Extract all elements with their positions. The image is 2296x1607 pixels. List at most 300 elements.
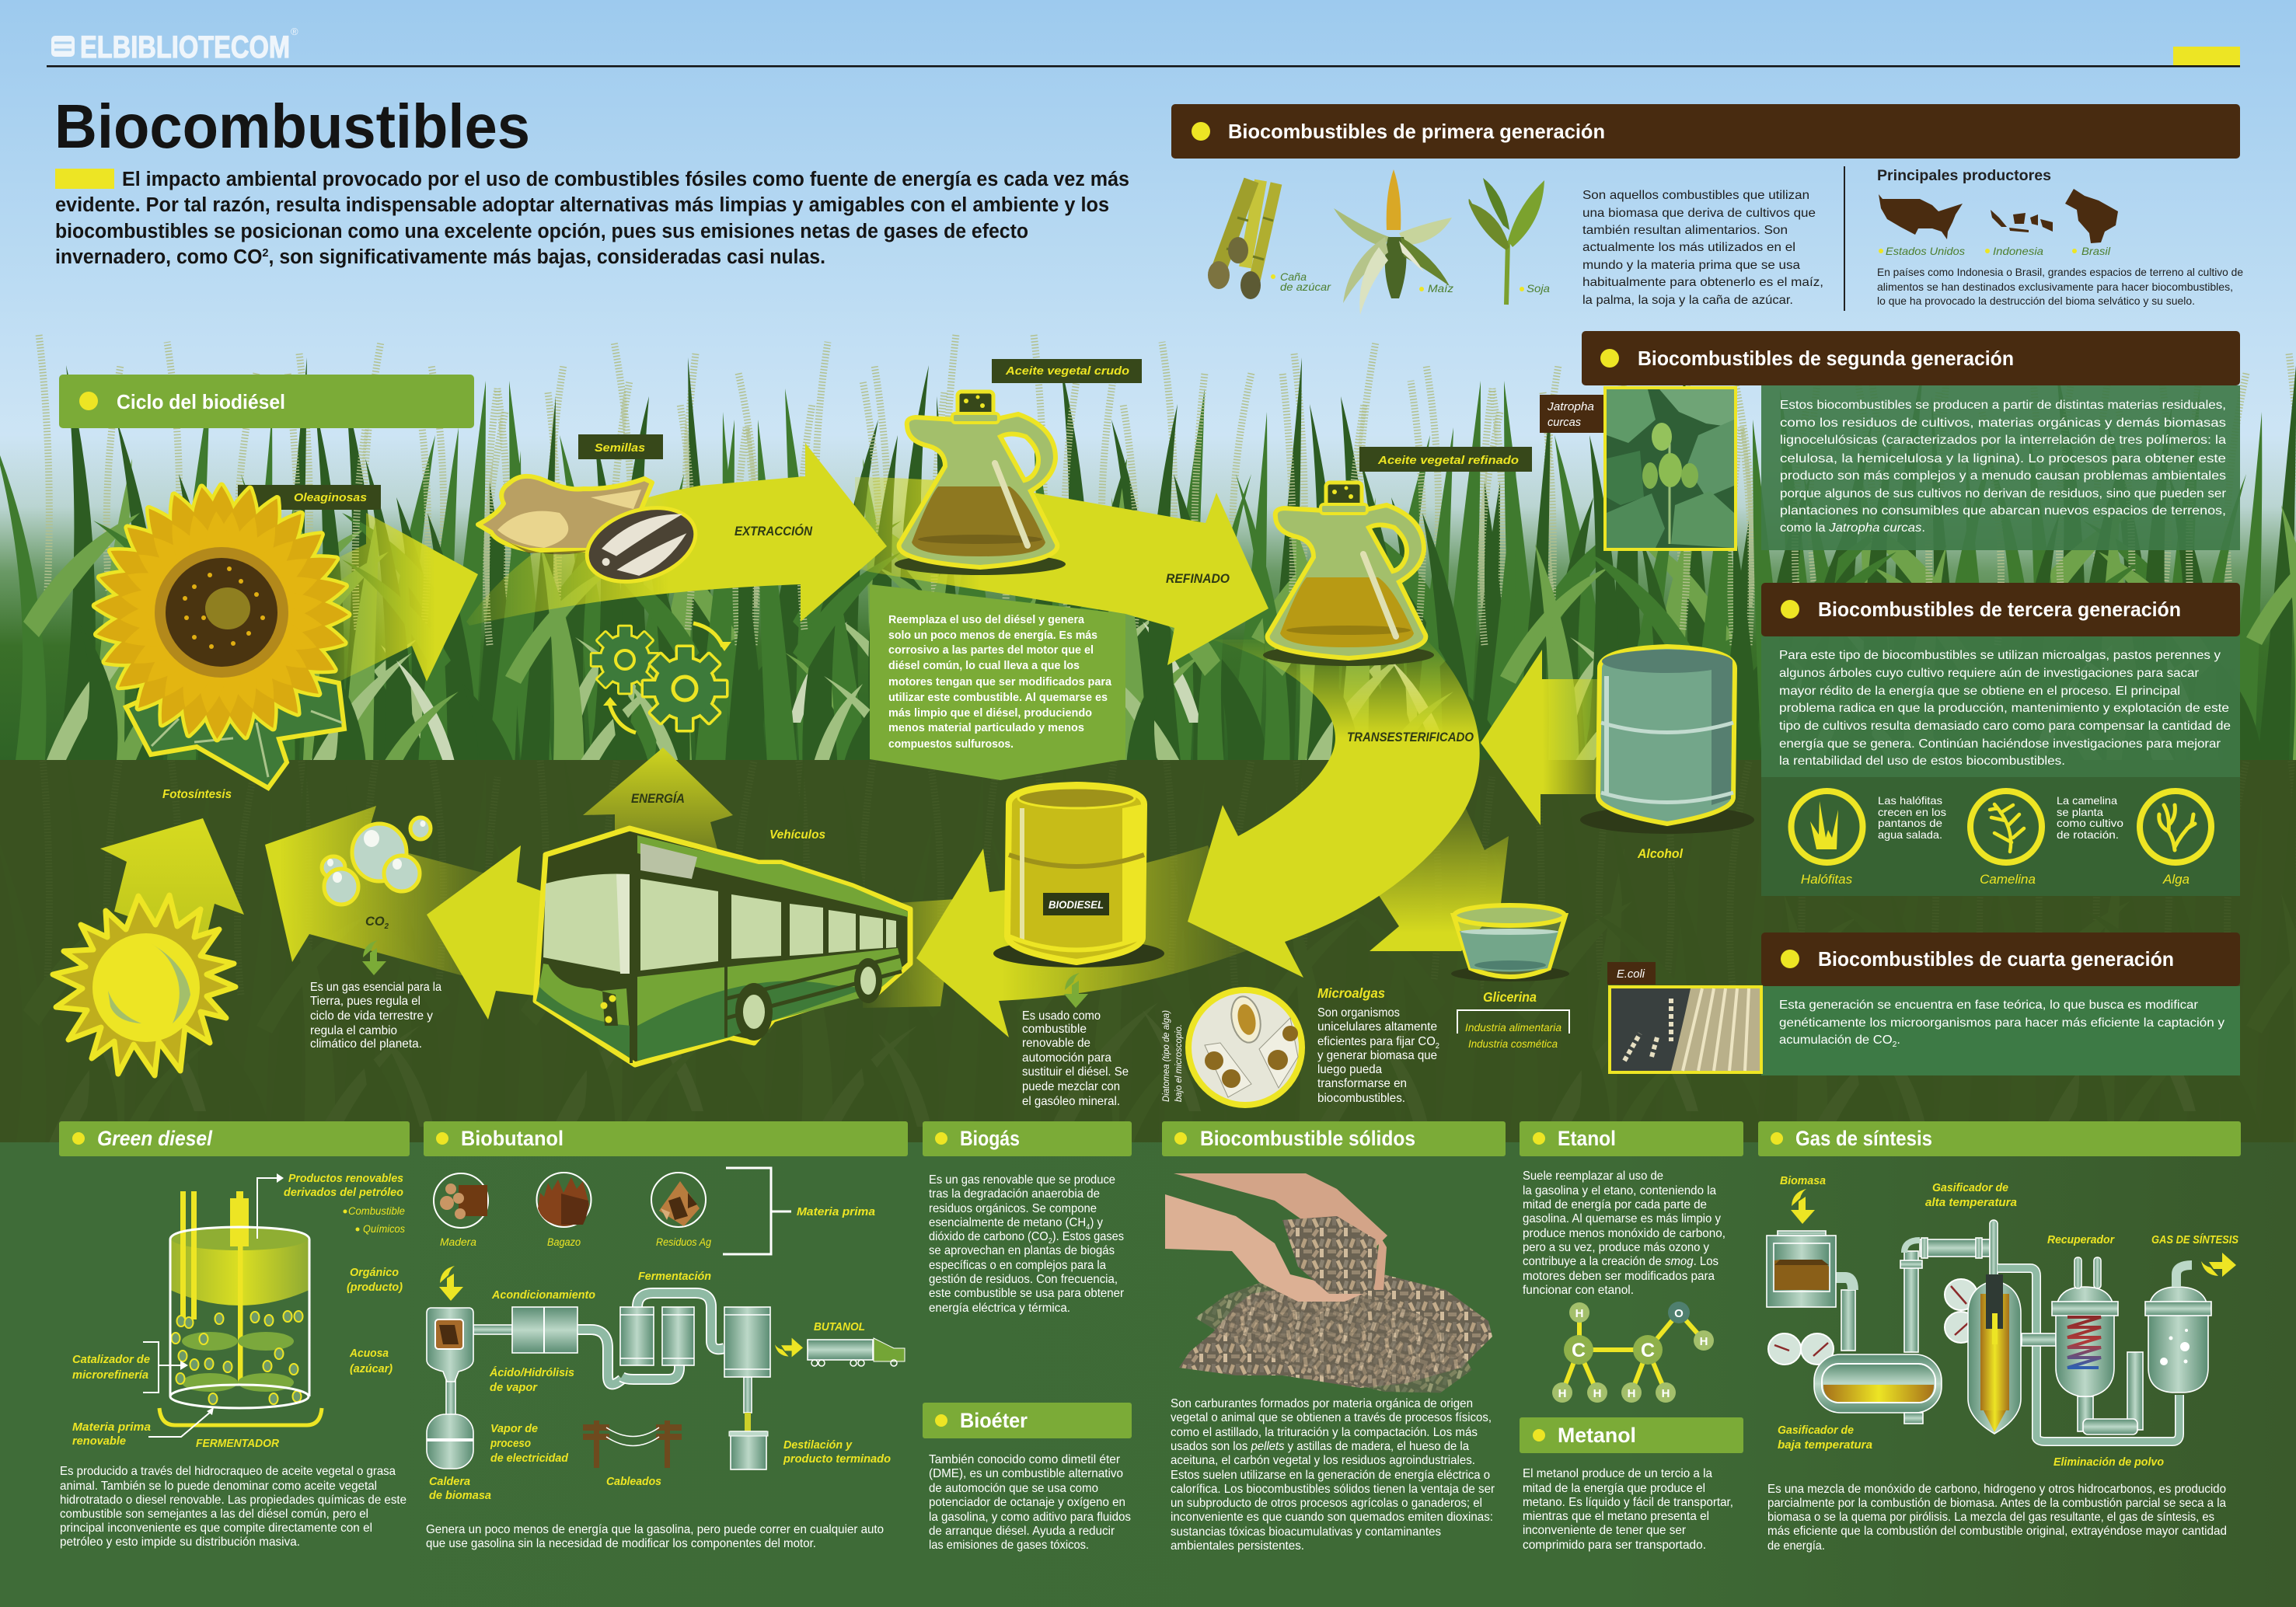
text: etanol: produce menos monóxido de carbono, (1523, 1227, 1725, 1240)
pipes (1841, 1290, 1855, 1351)
text: etanol: motores deben ser modificados para (1523, 1270, 1715, 1283)
icon: maíz (1334, 169, 1452, 315)
intro text: invernadero, como CO (55, 246, 267, 268)
text: metanol: mientras que el metano presenta el (1523, 1510, 1709, 1523)
text: biobutanol: Genera un poco menos de energía que la gasolina, pero puede correr en cualquier auto (426, 1523, 884, 1536)
text: productores: lo que ha provocado la destrucción del bioma selvático y su suelo. (1877, 295, 2195, 307)
intro text: biocombustibles se posicionan como una excelente opción, pues sus emisiones netas de gases de efecto (55, 221, 1028, 242)
logo: ELBIBLIOTECOM (80, 30, 290, 64)
background: corn field (0, 334, 2296, 799)
text: sólidos: ambientales persistentes. (1171, 1539, 1304, 1553)
icon: barril alcohol (1580, 647, 1754, 834)
panel: cuarta generación (1607, 932, 2240, 1075)
text: gas de síntesis: de energía. (1767, 1539, 1825, 1553)
callout: diésel box: diésel común, lo cual lleva a que los (888, 659, 1080, 672)
text: green diesel: animal. También se lo puede denominar como aceite vegetal (60, 1480, 377, 1493)
caption: diatomea: Diatomea (tipo de alga) (1162, 1010, 1171, 1102)
background: faint leaf texture (180, 1012, 2195, 1111)
text: biogás: ). Estos gases (1052, 1230, 1124, 1243)
icon: residuos (651, 1173, 706, 1227)
colector (731, 1431, 766, 1469)
text: sólidos: inconveniente es que cuando son quemados emiten dioxinas: (1171, 1511, 1493, 1524)
header: gas de síntesis (1758, 1121, 2241, 1156)
text box: segunda generación: Estos biocombustibles se producen a partir de distintas materias residuales, (1780, 399, 2226, 412)
labels: proceso biobutanol: de biomasa (429, 1490, 491, 1502)
text: CO2: climático del planeta. (310, 1037, 422, 1051)
text: biogás: 4 (1086, 1223, 1090, 1232)
text: green diesel: Es producido a través del hidrocraqueo de aceite vegetal o grasa (60, 1465, 396, 1478)
text: sólidos: sustancias tóxicas bioacumulativas y contaminantes (1171, 1525, 1441, 1539)
icon: barril biodiésel: BIODIESEL (1049, 898, 1104, 911)
text: biodiésel: automoción para (1022, 1051, 1111, 1065)
callout: diésel box: menos material particulado y menos (888, 721, 1084, 734)
label: oleaginosas (238, 485, 381, 510)
callout: diésel box: Reemplaza el uso del diésel y genera (888, 613, 1085, 626)
label: caña: Caña (1280, 270, 1307, 283)
label: aceite crudo (992, 359, 1142, 383)
icon: halófitas (1791, 791, 1862, 887)
text: gas de síntesis: parcialmente por la combustión de biomasa. Antes de la combustión parcial se seca a la (1767, 1497, 2226, 1510)
diagram: gasificación (1767, 1220, 2211, 1441)
labels: fermentador: Productos renovables (288, 1173, 403, 1185)
text: gas de síntesis: Es una mezcla de monóxido de carbono, hidrogeno y otros hidrocarbonos, es producido (1767, 1483, 2226, 1496)
icon: madera (434, 1173, 488, 1228)
intro text: 2 (262, 246, 269, 260)
callout: diésel box: solo un poco menos de energía. Es más (888, 629, 1097, 642)
labels: fermentador: (azúcar) (350, 1363, 393, 1375)
header: sólidos: Biocombustible sólidos (1200, 1127, 1415, 1150)
icon: molécula de etanol: H (1662, 1387, 1670, 1400)
text box: cuarta generación: . (1896, 1034, 1900, 1047)
text: biodiésel: combustible (1022, 1023, 1087, 1036)
text: biogás: residuos orgánicos. Se compone (929, 1202, 1097, 1215)
banner: segunda generación (1582, 331, 2240, 385)
icon: molécula de etanol: C (1641, 1340, 1655, 1361)
photo: E. coli (1610, 987, 1761, 1072)
text: halófitas: Las halófitas (1878, 794, 1942, 807)
panel: tercera generación (1761, 583, 2240, 896)
arrow: vehículos a CO2 (427, 845, 591, 1020)
text: microalgas: unicelulares altamente (1317, 1020, 1437, 1034)
text: sólidos: aceituna, el carbón vegetal y los residuos agroindustriales. (1171, 1454, 1475, 1467)
text box: segunda generación: como la Jatropha curcas . (1780, 521, 1925, 535)
text: biodiésel: Es usado como (1022, 1009, 1101, 1023)
panel: green diesel (59, 1121, 410, 1549)
labels: fermentador: Combustible (348, 1205, 405, 1217)
text: metanol (1523, 1467, 1733, 1552)
text: etanol: gasolina. Al quemarse es más limpio y (1523, 1212, 1721, 1225)
header rule (47, 65, 2240, 67)
text box: segunda generación: plantaciones no consumibles que abarcan nuevos espacios de terrenos, (1780, 504, 2226, 518)
header: green diesel: Green diesel (97, 1127, 212, 1150)
label: vehículos: Vehículos (769, 828, 825, 842)
banner: ciclo (59, 375, 474, 428)
text box: cuarta generación: genéticamente los microorganismos para hacer más eficiente la captación y (1779, 1016, 2224, 1030)
hopper (1767, 1236, 1836, 1307)
text: productores (1877, 266, 2243, 307)
labels: fermentador: Materia prima (72, 1421, 151, 1434)
map: Brasil (2065, 189, 2118, 243)
diagram: fermentador (143, 1173, 322, 1437)
label: aceite crudo: Aceite vegetal crudo (1005, 365, 1129, 378)
text: bioéter: potenciador de octanaje y oxígeno en (929, 1496, 1125, 1509)
panel: biobutanol (424, 1121, 908, 1550)
panel: biogás (923, 1121, 1132, 1315)
text: etanol: pero a su vez, produce más ozono y (1523, 1241, 1709, 1254)
arrow: biodiésel a vehículos (916, 845, 1247, 1037)
text: bioéter: de automoción que se usa como (929, 1482, 1098, 1495)
text: camelina: se planta (2057, 806, 2103, 818)
icon: molécula de etanol: C (1572, 1340, 1586, 1361)
text: sólidos: Son carburantes formados por materia orgánica de origen (1171, 1397, 1473, 1410)
icon: bagazo (536, 1173, 591, 1227)
text: extracción: EXTRACCIÓN (735, 524, 813, 539)
title: Biocombustibles (54, 92, 530, 161)
labels: proceso biobutanol: de vapor (490, 1382, 538, 1394)
text: CO2: regula el cambio (310, 1024, 397, 1037)
callout: diésel box: más limpio que el diésel, produciendo (888, 706, 1092, 720)
labels: países: Brasil (2081, 245, 2111, 257)
text: sólidos: un subproducto de otros procesos agrícolas o ganaderos; el (1171, 1497, 1482, 1510)
panel: bioéter (923, 1403, 1132, 1552)
panel: ciclo del biodiésel (53, 359, 1754, 1108)
icon: molécula de etanol: H (1628, 1387, 1635, 1400)
icon: flecha biomasa (439, 1266, 463, 1301)
labels: países: Indonesia (1993, 245, 2043, 257)
header: bioéter (923, 1403, 1132, 1438)
text box: segunda generación: como los residuos de cultivos, materias orgánicas y demás biomasas (1780, 417, 2226, 430)
text: microalgas: eficientes para fijar CO (1317, 1035, 1444, 1048)
text: refinado: REFINADO (1166, 571, 1230, 586)
callout: diésel box: corrosivo a las partes del motor que el (888, 643, 1094, 657)
map: Indonesia (1991, 210, 2053, 232)
text: biogás (929, 1173, 1125, 1315)
label: caña: de azúcar (1280, 281, 1331, 293)
arrow: CO2 (265, 806, 497, 981)
labels: proceso biobutanol: Ácido/Hidrólisis (489, 1366, 574, 1379)
text box: tercera generación: Para este tipo de biocombustibles se utilizan microalgas, pastos perennes y (1779, 649, 2221, 662)
panel: segunda generación (1540, 331, 2240, 550)
text box: cuarta generación: Esta generación se encuentra en fase teórica, lo que busca es modificar (1779, 999, 2199, 1012)
text: CO2: ciclo de vida terrestre y (310, 1009, 433, 1023)
text: metanol: El metanol produce de un tercio a la (1523, 1467, 1712, 1480)
label: materia prima: Materia prima (797, 1206, 875, 1218)
labels: proceso biobutanol: Destilación y (783, 1439, 853, 1452)
text: biogás: Es un gas renovable que se produce (929, 1173, 1115, 1187)
text: camelina: de rotación. (2057, 828, 2119, 841)
recuperador (2056, 1287, 2114, 1396)
callout: diésel box: motores tengan que ser modificados para (888, 675, 1112, 688)
icon: molécula de etanol: O (1674, 1307, 1684, 1320)
label: semillas: Semillas (595, 442, 645, 455)
text: metanol: inconveniente de tener que ser (1523, 1524, 1687, 1537)
labels: proceso biobutanol: de electricidad (490, 1452, 569, 1465)
label: aceite refinado: Aceite vegetal refinado (1377, 455, 1519, 467)
label: CO2: 2 (384, 922, 389, 931)
text: definición primera generación: también resultan alimentarios. Son (1582, 224, 1788, 237)
reactor (427, 1308, 473, 1382)
text: bioéter (929, 1453, 1131, 1552)
text: metanol: comprimido para ser transportado. (1523, 1539, 1706, 1552)
icon: flecha gas de síntesis (2201, 1253, 2236, 1277)
text: bioéter: (DME), es un combustible alternativo (929, 1467, 1123, 1480)
label: jatropha: curcas (1548, 416, 1581, 429)
text box: segunda generación (1761, 385, 2240, 550)
label: semillas (578, 434, 663, 459)
text: green diesel: hidrotratado o diesel renovable. Las propiedades químicas de este (60, 1494, 407, 1507)
text: gas de síntesis: biomasa o se la quema por pirólisis. La mezcla del gas resultante, el gas de síntesis, es (1767, 1511, 2214, 1524)
icon: girasol (93, 484, 350, 788)
text: bioéter: las emisiones de gases tóxicos. (929, 1539, 1089, 1552)
panel: primera generación (1171, 104, 2243, 315)
text: etanol (1523, 1170, 1725, 1297)
panel: gas de síntesis (1758, 1121, 2241, 1553)
separador (2148, 1287, 2208, 1393)
text box: tercera generación: algunos árboles cuyo cultivo requiere aún de investigaciones para sacar (1779, 667, 2200, 680)
text: microalgas: transformarse en (1317, 1077, 1407, 1090)
diagram: proceso biobutanol (427, 1293, 905, 1469)
arrow: energía (583, 748, 733, 849)
text: definición primera generación (1582, 189, 1823, 307)
label: E.coli: E.coli (1617, 967, 1645, 981)
banner: ciclo: Ciclo del biodiésel (117, 390, 285, 413)
header: biogás (923, 1121, 1132, 1156)
labels: proceso biobutanol: Fermentación (638, 1271, 711, 1283)
intro text: , son significativamente más bajas, consideradas casi nulas. (269, 246, 825, 268)
text box: segunda generación: celulosa, la hemicelulosa y la lignina). Lo procesos para obtener este (1780, 452, 2226, 465)
bracket: materia prima (723, 1168, 791, 1254)
header: sólidos (1162, 1121, 1506, 1156)
icon: camelina: Camelina (1980, 872, 2036, 887)
camión (808, 1338, 905, 1366)
label: caña (1271, 270, 1331, 293)
label: maíz: Maíz (1428, 282, 1453, 295)
fermentadores (620, 1307, 654, 1365)
text: sólidos: calorífica. Los biocombustibles sólidos tienen la ventaja de ser (1171, 1483, 1495, 1496)
text box: cuarta generación: 2 (1893, 1041, 1897, 1049)
icon: jarra aceite refinado (1263, 483, 1434, 666)
icon: molécula de etanol (1552, 1302, 1714, 1403)
callout: diésel box: compuestos sulfurosos. (888, 737, 1014, 751)
labels: gasificación (1778, 1175, 2238, 1469)
text: definición primera generación: mundo y la materia prima que se usa (1582, 259, 1800, 272)
labels: fermentador: Catalizador de (72, 1354, 150, 1366)
text: biodiésel: sustituir el diésel. Se (1022, 1065, 1129, 1079)
icon: molécula de etanol: H (1558, 1387, 1566, 1400)
text: biobutanol (426, 1523, 884, 1550)
caption: diatomea: bajo el microscopio. (1174, 1024, 1184, 1102)
divider (1844, 166, 1845, 311)
text: microalgas: 2 (1436, 1042, 1439, 1051)
label: jatropha (1540, 395, 1603, 433)
text: biogás: dióxido de carbono (CO (929, 1230, 1060, 1243)
logo: ® (291, 26, 298, 37)
header: biobutanol (424, 1121, 908, 1156)
labels: fermentador: FERMENTADOR (196, 1438, 279, 1450)
text: biodiésel (1022, 1009, 1129, 1108)
arrow: extracción (466, 443, 887, 626)
header: etanol: Etanol (1558, 1127, 1616, 1150)
header: metanol (1520, 1417, 1743, 1453)
header: biobutanol: Biobutanol (461, 1127, 564, 1150)
photo: pellets (1165, 1173, 1492, 1418)
text: etanol: Suele reemplazar al uso de (1523, 1170, 1663, 1183)
text: sólidos: Estos suelen utilizarse en la generación de energía eléctrica o (1171, 1469, 1490, 1482)
text: energía: ENERGÍA (631, 791, 685, 806)
text: definición primera generación: actualmente los más utilizados en el (1582, 241, 1795, 254)
labels: proceso biobutanol: proceso (490, 1438, 531, 1450)
text: sólidos: vegetal o animal que se obtienen a través de procesos físicos, (1171, 1411, 1492, 1424)
labels: gasificación: Gasificador de (1778, 1424, 1854, 1437)
labels: fermentador: (producto) (347, 1281, 403, 1294)
text: green diesel (60, 1465, 407, 1549)
text: biodiésel: renovable de (1022, 1037, 1090, 1050)
text box: segunda generación: lignocelulósicas (caracterizados por la interrelación de tres polímeros: la (1780, 434, 2226, 447)
text: microalgas: Son organismos (1317, 1006, 1400, 1020)
text: etanol: mitad de energía por cada parte de (1523, 1198, 1707, 1211)
text: biogás: se aprovechan en plantas de biogás (929, 1244, 1115, 1257)
panel: metanol (1520, 1417, 1743, 1552)
text: halófitas: crecen en los (1878, 806, 1946, 818)
text: biogás: específicas o en complejos para la (929, 1259, 1106, 1272)
text: metanol: metano. Es líquido y fácil de transportar, (1523, 1496, 1733, 1509)
label: maíz (1419, 282, 1453, 295)
icon: molécula de etanol: H (1593, 1387, 1601, 1400)
text: biogás: gestión de residuos. Con frecuencia, (929, 1273, 1118, 1286)
arrow: alcohol (1481, 650, 1617, 825)
labels: fermentador: Acuosa (349, 1347, 389, 1360)
callout: diésel box (870, 584, 1125, 780)
icon: jarra aceite crudo (895, 392, 1066, 575)
callout: diésel box: utilizar este combustible. Al quemarse es (888, 691, 1108, 704)
header: biogás: Biogás (960, 1127, 1020, 1150)
banner: primera generación: Biocombustibles de primera generación (1228, 120, 1605, 143)
arrow: glicerina (1370, 798, 1509, 951)
pipes (473, 1325, 512, 1334)
label: CO2: CO (365, 914, 386, 929)
banner: tercera generación: Biocombustibles de tercera generación (1818, 598, 2181, 621)
text box: tercera generación: energía que se genera. Continúan haciéndose investigaciones para mejorar (1779, 737, 2221, 751)
text: green diesel: combustible son semejantes a las del diésel común, pero el (60, 1508, 368, 1521)
text box: cuarta generación (1761, 986, 2240, 1075)
banner: cuarta generación: Biocombustibles de cuarta generación (1818, 947, 2174, 971)
text box: tercera generación: tipo de cultivos resulta demasiado caro como para compensar la cantidad de (1779, 720, 2231, 733)
header: metanol: Metanol (1558, 1424, 1636, 1447)
text: microalgas: biocombustibles. (1317, 1092, 1405, 1105)
background: dark green band (0, 760, 2296, 1149)
text: camelina (2057, 794, 2123, 841)
cableado (583, 1421, 682, 1468)
text: etanol: funcionar con etanol. (1523, 1284, 1634, 1297)
text: gas de síntesis: más eficiente que la combustión del combustible original, extrayéndose mayor cantidad (1767, 1525, 2227, 1538)
text: usos glicerina: Industria cosmética (1468, 1038, 1558, 1050)
banner: primera generación (1171, 104, 2240, 159)
banner: segunda generación: Biocombustibles de segunda generación (1638, 347, 2014, 370)
text: halófitas (1878, 794, 1946, 841)
label: glicerina: Glicerina (1483, 989, 1537, 1005)
arrow: transesterificado (1188, 640, 1480, 978)
text box: tercera generación (1761, 636, 2240, 777)
icon: camelina (1970, 791, 2042, 887)
horizontal vessel (1814, 1354, 1942, 1413)
icon: flecha biodiésel (1064, 973, 1088, 1008)
labels: gasificación: Gasificador de (1932, 1182, 2008, 1194)
icon: sol (53, 895, 236, 1075)
text: productores: En países como Indonesia o Brasil, grandes espacios de terreno al cultivo de (1877, 266, 2243, 278)
caldera (427, 1414, 473, 1469)
text: camelina: como cultivo (2057, 817, 2123, 829)
labels: proceso biobutanol: BUTANOL (814, 1321, 865, 1333)
text: biogás: esencialmente de metano (CH (929, 1216, 1097, 1229)
header: etanol (1520, 1121, 1743, 1156)
text: CO2: Es un gas esencial para la (310, 981, 441, 994)
labels: gasificación: Eliminación de polvo (2053, 1456, 2164, 1469)
text: green diesel: principal inconveniente es que compite directamente con el (60, 1522, 372, 1535)
intro text: evidente. Por tal razón, resulta indispensable adoptar alternativas más limpias y amigables con el ambiente y los (55, 194, 1109, 216)
label: aceite refinado (1359, 447, 1532, 472)
icon: diatomeas (1188, 990, 1302, 1105)
arrow: oleaginosas a semillas (311, 513, 478, 695)
labels: gasificación: baja temperatura (1778, 1439, 1872, 1452)
text: microalgas: luego pueda (1317, 1063, 1382, 1076)
labels: fermentador: renovable (72, 1435, 126, 1448)
panel: etanol (1520, 1121, 1743, 1403)
label: jatropha: Jatropha (1547, 400, 1594, 413)
intro text: El impacto ambiental provocado por el uso de combustibles fósiles como fuente de energía es cada vez más (122, 169, 1129, 190)
labels: fermentador: Orgánico (350, 1267, 399, 1279)
text: biobutanol: que use gasolina sin la necesidad de modificar los componentes del motor. (426, 1537, 816, 1550)
text: bioéter: la gasolina, y como aditivo para fluidos (929, 1511, 1131, 1524)
text: biogás: ) y (1090, 1216, 1103, 1229)
labels: proceso biobutanol: Vapor de (490, 1423, 538, 1435)
label: fotosíntesis: Fotosíntesis (162, 788, 232, 801)
text: bioéter: de arranque diésel. Ayuda a reducir (929, 1525, 1115, 1538)
labels: proceso biobutanol: producto terminado (783, 1453, 891, 1466)
icon: alga (2140, 791, 2211, 887)
text: microalgas: Microalgas (1317, 985, 1385, 1001)
background: sky (0, 0, 2296, 760)
label: alcohol: Alcohol (1637, 846, 1684, 861)
labels: materias: Residuos Ag (656, 1236, 711, 1248)
text box: tercera generación: mayor rédito de la energía que se obtiene en el proceso. El principal (1779, 685, 2180, 698)
arrow: fotosíntesis (100, 818, 244, 943)
text: biogás: este combustible se usa para obtener (929, 1287, 1125, 1300)
label: oleaginosas: Oleaginosas (294, 492, 367, 504)
text: etanol: la gasolina y el etano, conteniendo la (1523, 1184, 1716, 1197)
icon: autobús (536, 828, 910, 1065)
background: lower green band (0, 1142, 2296, 1607)
text: usos glicerina (1465, 1022, 1561, 1050)
photo: jatropha curcas (1605, 388, 1736, 549)
header: bioéter: Bioéter (960, 1409, 1028, 1432)
text: sólidos: usados son los pellets y astillas de madera, el hueso de la (1171, 1440, 1469, 1453)
drum (512, 1307, 577, 1353)
labels: fermentador (72, 1173, 405, 1450)
banner: cuarta generación (1761, 932, 2240, 986)
text: gas de síntesis (1767, 1483, 2227, 1553)
text: biogás: tras la degradación anaerobia de (929, 1187, 1100, 1201)
icon: engranajes (592, 623, 731, 733)
text: microalgas (1317, 985, 1439, 1105)
labels: materias (440, 1236, 711, 1248)
icon: vaso glicerina (1451, 905, 1569, 981)
text: definición primera generación: la palma, la soja y la caña de azúcar. (1582, 294, 1793, 307)
banner: tercera generación (1761, 583, 2240, 636)
text: etanol: contribuye a la creación de smog. Los (1523, 1255, 1719, 1268)
text: halófitas: agua salada. (1878, 828, 1942, 841)
leaves (126, 661, 344, 788)
text: bioéter: También conocido como dimetil éter (929, 1453, 1121, 1466)
